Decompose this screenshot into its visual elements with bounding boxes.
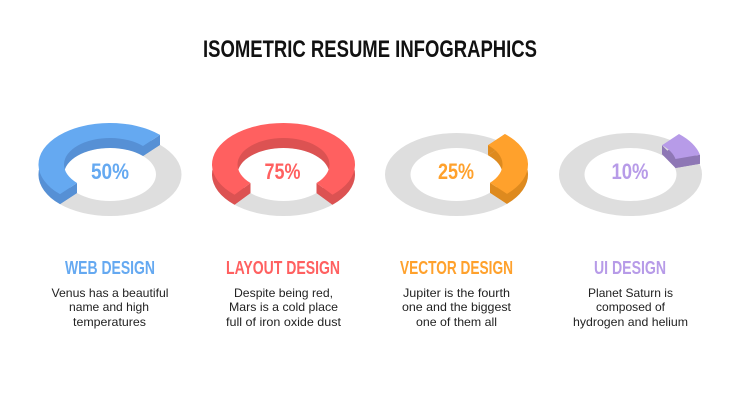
description — [226, 286, 342, 329]
panel: layout design — [212, 123, 355, 329]
percentage: 10% — [612, 159, 648, 184]
panel: vector design — [385, 133, 528, 329]
description: Jupiter is the fourth — [403, 286, 510, 300]
panel: web design — [38, 123, 181, 329]
donut chart: 25% — [385, 133, 528, 216]
panel: ui design — [559, 133, 702, 329]
description: Venus has a beautiful — [52, 286, 168, 300]
description: hydrogen and helium — [573, 315, 688, 329]
description: Planet Saturn is — [588, 286, 673, 300]
description: one of them all — [416, 315, 497, 329]
title: ISOMETRIC RESUME INFOGRAPHICS — [203, 36, 537, 63]
heading: VECTOR DESIGN — [400, 258, 513, 278]
heading: WEB DESIGN — [65, 258, 155, 278]
donut chart: 50% — [38, 123, 181, 216]
description — [573, 286, 688, 329]
percentage: 50% — [91, 159, 129, 184]
donut chart: 75% — [212, 123, 355, 216]
percentage: 25% — [438, 159, 474, 184]
percentage: 75% — [264, 159, 300, 184]
description: temperatures — [73, 315, 146, 329]
description: composed of — [596, 300, 666, 314]
heading: UI DESIGN — [594, 258, 666, 278]
description: one and the biggest — [402, 300, 512, 314]
description: Mars is a cold place — [229, 300, 338, 314]
donut chart: 10% — [559, 133, 702, 216]
description: name and high — [69, 300, 149, 314]
heading: LAYOUT DESIGN — [226, 258, 340, 278]
description — [52, 286, 168, 329]
description: Despite being red, — [234, 286, 333, 300]
description: full of iron oxide dust — [226, 315, 342, 329]
description — [402, 286, 512, 329]
